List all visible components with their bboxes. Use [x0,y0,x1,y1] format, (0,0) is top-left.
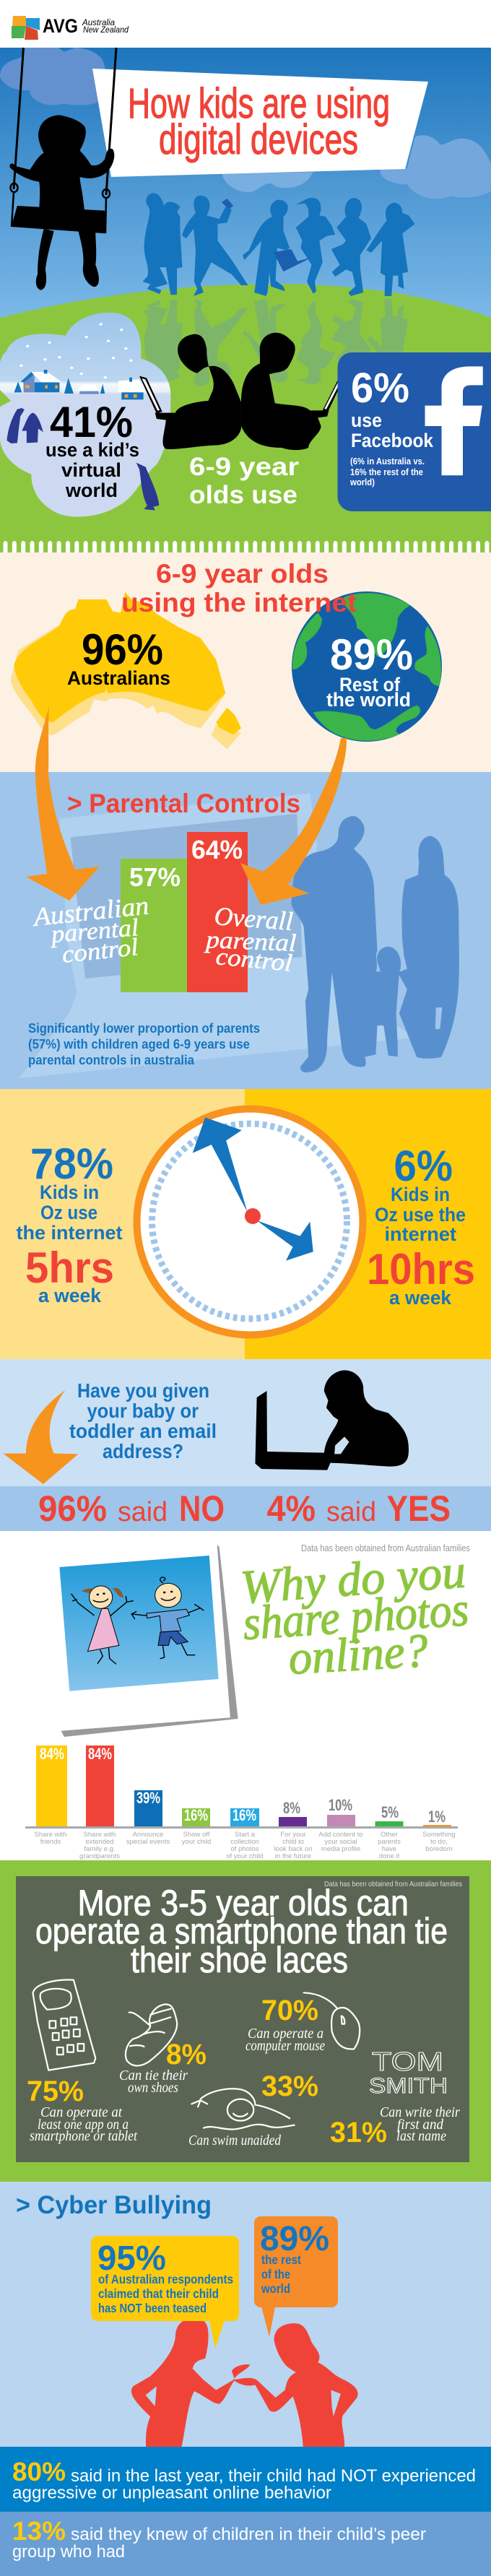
bar labels: to do, [430,1838,448,1846]
stat: 75% operate an app: 75% [27,2076,84,2107]
bar values: 5% [381,1803,399,1821]
panel: cyber bullying [0,2182,491,2447]
logo: AVG Australia New Zealand: New Zealand [83,25,129,35]
stat: 41%: use a kid’s [45,439,139,461]
panel: green frame [0,1860,491,2182]
title text [128,80,390,163]
stat: 31% write their name: first and [397,2117,444,2133]
bar labels: Announce [133,1831,163,1839]
answers: 96% NO and 4% YES [38,1488,451,1529]
globe [292,591,442,742]
bar labels: friends [40,1838,61,1846]
text: 6-9 year olds use [189,453,299,509]
stat: 78% 5hrs a week: Kids in [40,1181,99,1203]
bar labels: of photos [230,1845,259,1853]
speech bubble: 95%: 95% [97,2239,166,2278]
clouds [0,48,491,199]
bar values: 39% [136,1789,160,1807]
family silhouette [291,816,459,1072]
heading: more 3-5 year olds: their shoe laces [131,1940,348,1980]
bar labels: look back on [274,1845,313,1853]
title text: How kids are using [128,80,390,127]
stat: 70% computer mouse [246,1995,325,2054]
logo: AVG Australia New Zealand [12,15,129,40]
icon: chalk swimmer [191,2089,295,2130]
bar labels: collection [230,1838,259,1846]
arrow: to answer [3,1390,78,1484]
stat: 8% tie shoes: 8% [166,2039,207,2070]
heading: why do you share photos online: share photos [241,1583,470,1650]
stat: 6% 10hrs a week: 6% [394,1142,453,1190]
band: 80% stat: aggressive or unpleasant online behavior [12,2483,331,2503]
stat: 41%: 41% [50,398,133,446]
stat: 6% 10hrs a week: a week [389,1287,452,1309]
logo: AVG Australia New Zealand: AVG [43,15,78,37]
bar labels: in the future [275,1852,311,1860]
icon: chalk shoe [126,2004,177,2065]
text: parental control note: Significantly lower proportion of parents [28,1021,260,1036]
text: parental control note: parental controls in australia [28,1053,195,1067]
chalk name: Tom Smith: TOM [372,2047,443,2076]
stat: 75% operate an app: least one app on a [38,2117,129,2133]
panel: chalkboard [16,1876,469,2162]
bar labels: special events [126,1838,170,1846]
band: 13% stat: group who had [12,2542,125,2562]
stat: 78% 5hrs a week: the internet [16,1222,123,1244]
snow village [14,370,144,399]
panel: virtual world cloud [0,313,170,517]
bar values: 84% [88,1745,112,1763]
stat: 75% operate an app: smartphone or tablet [30,2128,137,2144]
stat: 31% write their name: 31% [330,2117,387,2148]
stat: 6% use Facebook: world) [349,477,375,487]
question: email address: Have you given [77,1379,209,1402]
stat: 89% rest of the world [326,630,413,711]
bar labels: your social [324,1838,357,1846]
text: 6-9 year olds use: 6-9 year [189,453,299,481]
stat: 70% computer mouse: Can operate a [248,2026,323,2042]
speech bubble: 89% [254,2216,338,2337]
stat: 78% 5hrs a week [16,1140,123,1306]
answers: 96% NO and 4% YES: said [118,1497,168,1527]
girl on swing [9,48,116,290]
band: 13% stat: said they knew of children in their child’s peer [71,2525,426,2544]
answers: 96% NO and 4% YES: 96% [38,1488,107,1529]
heading: cyber bullying: > Cyber Bullying [16,2191,212,2219]
heading: why do you share photos online: Why do you [239,1545,467,1614]
question: email address: address? [103,1440,183,1462]
stat: 78% 5hrs a week: 5hrs [25,1244,114,1292]
clock [133,1105,367,1339]
heading: Parental Controls: > Parental Controls [67,789,300,818]
stat: 6% use Facebook: (6% in Australia vs. [350,456,425,467]
stat: 6% use Facebook: 6% [351,365,409,412]
heading: 6-9 year olds using the internet: 6-9 year olds [156,559,329,589]
bar values: 8% [283,1799,300,1817]
text: parental control note [28,1021,260,1067]
stat: 6% 10hrs a week: Oz use the [375,1204,466,1226]
label: Australian parental control [31,890,150,968]
bar labels: of your child [226,1852,264,1860]
hill [0,284,491,553]
label: Australian parental control: parental [49,914,139,948]
stat: 70% computer mouse: 70% [261,1995,318,2026]
bar labels: your child [182,1838,211,1846]
bar labels: extended [85,1838,114,1846]
speech bubble: 95%: claimed that their child [98,2286,219,2301]
stat: 75% operate an app: Can operate at [40,2104,122,2120]
chalk name: Tom Smith: SMITH [369,2074,448,2098]
arrow: to overall parental control [240,738,347,905]
bar labels: media profile [321,1845,360,1853]
bar labels: parents [378,1838,401,1846]
bar values: 10% [329,1796,352,1814]
chalk name: Tom Smith [369,2047,448,2098]
heading: more 3-5 year olds: More 3-5 year olds can [78,1883,409,1923]
icon: chalk phone [33,1979,95,2070]
stat: 78% 5hrs a week: a week [38,1285,102,1306]
answers: 96% NO and 4% YES: said [326,1497,376,1527]
question: email address: toddler an email [69,1420,217,1442]
panel: hours online left [0,1089,245,1359]
arrow: to Australian parental control [26,706,100,901]
stat: 6% 10hrs a week: Kids in [391,1184,450,1205]
answers: 96% NO and 4% YES: YES [387,1488,451,1529]
stat: 41% [45,398,139,501]
stat: 6% use Facebook: Facebook [351,430,434,451]
speech bubble: 89%: world [261,2281,290,2296]
bar values: 1% [428,1808,446,1826]
band: 13% stat: 13% [12,2516,66,2546]
heading: 6-9 year olds using the internet [121,559,357,617]
bar values [40,1745,446,1826]
answers: 96% NO and 4% YES: NO [179,1488,225,1529]
bar labels: grandparents [79,1852,120,1860]
question: email address: your baby or [87,1400,199,1422]
bar labels: Share with [84,1831,116,1839]
drawing: boy [131,1577,204,1659]
stat: 6% use Facebook: use [351,409,382,431]
panel: hours online right [245,1089,491,1359]
panel: Facebook [338,352,491,511]
bar labels: Start a [235,1831,256,1839]
stat: 6% use Facebook: 16% the rest of the [350,467,423,477]
icon: chalk mouse [304,1992,360,2049]
stat: 6% 10hrs a week: 10hrs [367,1245,475,1293]
band: 13% stat [0,2512,491,2576]
kids with laptops [139,333,344,450]
bar labels: have [382,1845,396,1853]
stat: 78% 5hrs a week: 78% [30,1140,113,1188]
speech bubble: 95%: has NOT been teased [98,2301,207,2315]
penguins [7,408,159,511]
stat: 33% swim [188,2070,318,2148]
stat: 96% Australians [67,625,170,689]
bar chart: reasons for sharing photos [25,1745,458,1860]
drawing: girl [71,1586,133,1664]
stat: 41%: world [65,480,118,501]
stat: 33% swim: Can swim unaided [188,2133,282,2148]
kid devices [222,199,313,272]
band: email answers [0,1486,491,1531]
bar labels: Share with [35,1831,66,1839]
icon: baby at laptop [255,1370,409,1470]
two women silhouettes [131,2317,358,2447]
heading: why do you share photos online: online? [287,1624,430,1685]
stat: 6% 10hrs a week: internet [384,1223,456,1245]
bar labels: family e.g. [84,1845,116,1853]
bar values: 16% [184,1806,208,1824]
text: parental control note: (57%) with children aged 6-9 years use [28,1037,250,1051]
heading: why do you share photos online [239,1545,470,1685]
label: overall parental control: control [214,943,293,977]
speech bubble: 95% [91,2236,239,2349]
stat: 89% rest of the world: Rest of [339,674,401,695]
bar labels: child to [282,1838,304,1846]
title banner [92,69,428,177]
band: 80% stat: 80% [12,2457,66,2486]
icon: Facebook f [425,366,483,475]
bar labels: Something [422,1831,456,1839]
bar chart: parental controls: 57% [129,862,181,892]
question: email address [69,1379,217,1462]
bar labels: Add content to [318,1831,363,1839]
stat: 31% write their name: last name [396,2128,446,2144]
speech bubble: 89%: the rest [261,2252,301,2267]
kids reflection [142,299,415,389]
polaroid photo [48,1545,238,1737]
bar values: 16% [233,1806,256,1824]
panel: internet use [0,552,491,772]
label: overall parental control [204,901,297,977]
stat: 6% use Facebook [349,365,434,487]
stat: 41%: virtual [61,459,121,481]
bar labels: Other [381,1831,398,1839]
logo: AVG Australia New Zealand: Australia [82,17,115,27]
text: 6-9 year olds use: olds use [189,481,297,509]
bar labels [35,1831,456,1860]
stat: 8% tie shoes: own shoes [128,2080,178,2096]
stat: 31% write their name: Can write their [380,2104,460,2120]
clock hands [193,1117,313,1261]
stat: 75% operate an app [27,2076,137,2144]
source note: Data has been obtained from Australian families [324,1880,462,1888]
panel: parental controls [0,772,491,1089]
stat: 8% tie shoes [119,2039,207,2096]
stat: 89% rest of the world: 89% [330,630,413,679]
band: 80% stat [0,2447,491,2512]
title text: digital devices [159,116,358,163]
heading: 6-9 year olds using the internet: using the internet [121,588,357,617]
stat: 31% write their name [330,2104,460,2148]
speech bubble: 95%: of Australian respondents [98,2272,233,2286]
bars [25,1745,458,1829]
stat: 8% tie shoes: Can tie their [119,2068,188,2083]
bar chart: parental controls: 64% [191,835,243,864]
answers: 96% NO and 4% YES: 4% [267,1488,316,1529]
stat: 96% Australians: 96% [82,625,163,674]
label: Australian parental control: Australian [31,890,150,932]
heading: more 3-5 year olds [35,1883,448,1980]
stat: 89% rest of the world: the world [326,689,411,711]
label: overall parental control: parental [204,927,297,957]
stat: 96% Australians: Australians [67,667,170,689]
panel: baby email [0,1359,491,1486]
stat: 6% 10hrs a week [367,1142,475,1309]
bar labels: For your [280,1831,306,1839]
panel: sky [0,48,491,329]
bar labels: Show off [183,1831,210,1839]
stat: 70% computer mouse: computer mouse [246,2038,325,2054]
bar labels: boredom [425,1845,453,1853]
speech bubble: 89%: 89% [260,2220,329,2258]
stat: 33% swim: 33% [261,2070,318,2102]
band: 80% stat: said in the last year, their child had NOT experienced [71,2466,476,2486]
picket fence [0,541,491,553]
blue kids silhouettes [142,193,415,296]
stat: 78% 5hrs a week: Oz use [40,1202,97,1223]
bar chart: parental controls [121,832,248,992]
speech bubble: 89%: of the [261,2267,290,2281]
laptop background [19,793,417,1078]
map of Australia [11,592,241,749]
snowflakes [19,323,132,378]
bar values: 84% [40,1745,64,1763]
label: overall parental control: Overall [213,901,294,936]
label: Australian parental control: control [61,934,139,968]
bar labels: done it [379,1852,400,1860]
